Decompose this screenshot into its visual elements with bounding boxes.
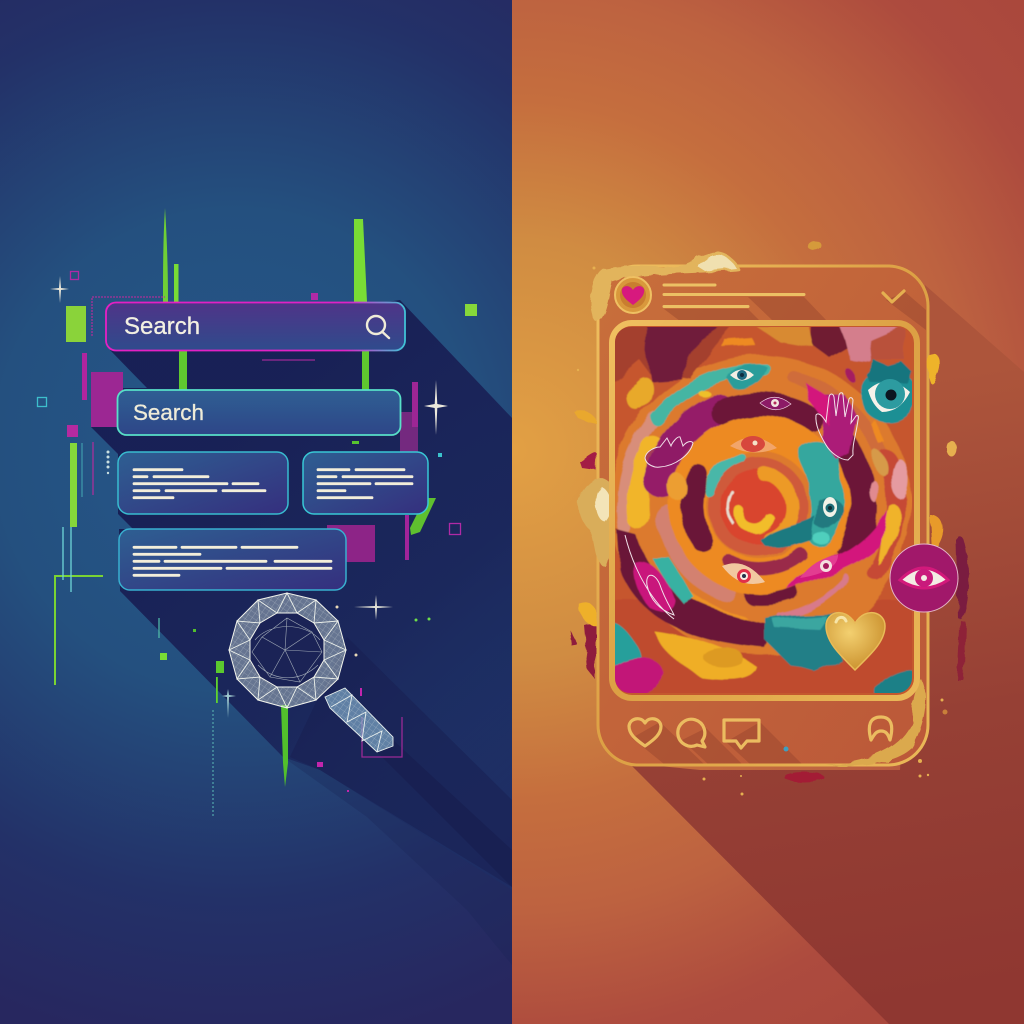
panel: right social background (512, 0, 1024, 1024)
small dots and specks (106, 441, 442, 656)
lower left eye (722, 563, 765, 584)
orange and gold dabs (626, 376, 655, 410)
result card 3 (119, 529, 346, 590)
icon: sparkle lower left (222, 689, 236, 718)
magenta stroke lower right (788, 510, 889, 590)
icon: gold heart (826, 613, 885, 670)
magnifier handle (325, 688, 393, 752)
result card 1 (118, 452, 288, 514)
yellow lower hand (653, 630, 755, 678)
center pink eye (730, 436, 777, 453)
panel: search glitch decorations (38, 208, 477, 817)
icon: comment circle (678, 719, 705, 747)
search bar label: Search (124, 313, 200, 340)
lower right magenta eye (800, 555, 838, 578)
long diagonal shadow of search interface (91, 300, 512, 887)
corner paint patches (615, 327, 729, 382)
icon: arch bookmark (869, 717, 892, 740)
white outlined palm top (816, 393, 858, 460)
green spike bars behind search bars (54, 208, 477, 787)
white outlined hand left (645, 437, 693, 467)
second search bar label: Search (133, 400, 204, 425)
result card 2 (303, 452, 428, 514)
magnifier lens (248, 612, 326, 690)
eye top teal (730, 370, 754, 380)
teal fish figure (797, 440, 843, 547)
magnifier ring (229, 593, 346, 708)
teal lower hand (765, 612, 842, 672)
phone header: profile text lines (664, 285, 804, 306)
icon: sparkle top left (50, 276, 69, 303)
maroon band lower left (617, 530, 775, 648)
teal and magenta bottom corner (615, 622, 642, 667)
large teal eye (868, 379, 910, 412)
small paint specks (577, 266, 948, 796)
badge: magenta eye (890, 544, 958, 612)
magenta blocks (67, 293, 418, 792)
swirl painting (615, 327, 912, 693)
icon: heart outline (629, 719, 661, 746)
icon: wireframe magnifying glass (229, 593, 393, 752)
phone bottom action icons (629, 717, 892, 748)
phone header: avatar heart (615, 277, 651, 313)
upper magenta hand (820, 395, 858, 458)
icon: speech bubble (724, 720, 759, 748)
panel: social phone frame (598, 266, 928, 765)
panel: left search background (0, 0, 512, 1024)
icon: sparkle lower right (354, 595, 393, 620)
eye on teal fish (823, 497, 837, 517)
icon: sparkle right (424, 380, 448, 435)
white outlined hand lower (625, 535, 674, 619)
search bar: magenta with icon (106, 302, 405, 350)
icon: chevron check (883, 291, 904, 302)
paint splashes around phone (570, 241, 968, 782)
painted swirl rings (616, 362, 908, 621)
icon: search magnifier (367, 316, 389, 338)
search bar: teal (118, 390, 400, 435)
eye backing shapes (727, 364, 768, 390)
phone icon and header shadows (632, 292, 926, 764)
painting frame and swirl artwork (609, 320, 920, 701)
magenta bottom left hand (634, 561, 675, 611)
outline squares and thin lines (38, 272, 460, 817)
small magenta eye (760, 397, 791, 410)
long diagonal shadow of phone (629, 285, 1024, 1024)
